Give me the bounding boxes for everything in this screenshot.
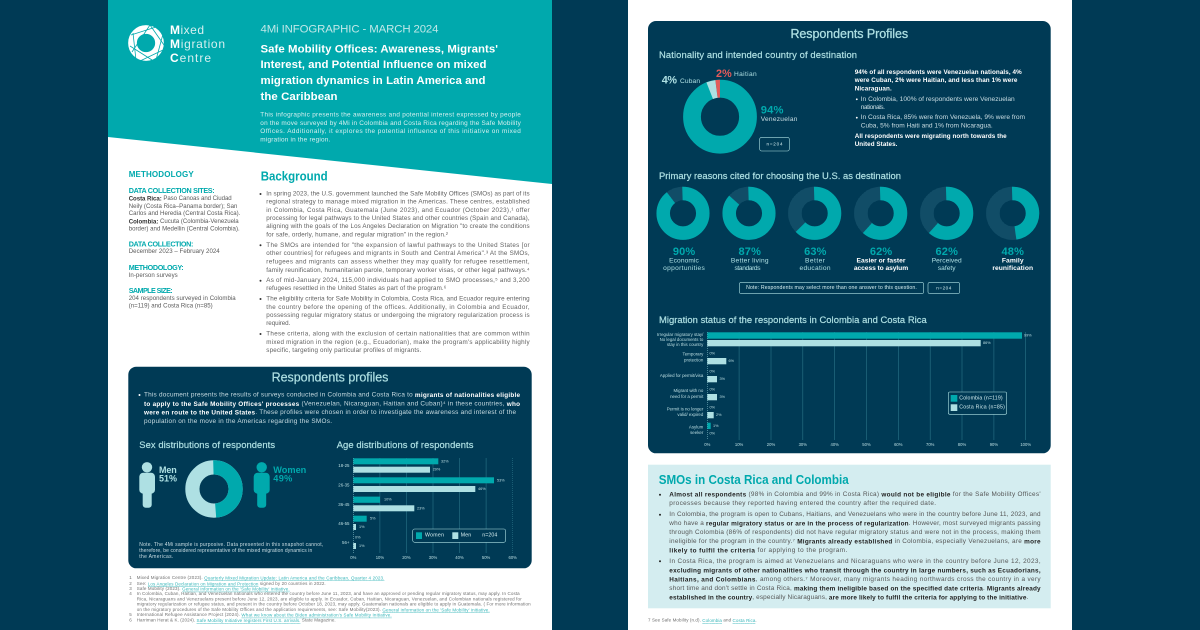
age legend: n=204	[482, 533, 497, 539]
label: Haitian	[716, 68, 757, 80]
migration status bar chart: 2%	[716, 413, 722, 417]
reason: economic opportunities: Economic	[669, 258, 700, 264]
intro description: on the move surveyed by 4Mi in Colombia and Costa Rica regarding the Safe Mobility	[260, 120, 522, 127]
migration status bar chart: 0%	[704, 442, 711, 447]
sample size box: n=204	[936, 286, 952, 290]
background bullets: in Colombia, Costa Rica, Guatemala (June 2023), and Ecuador (October 2023),¹ offer	[266, 207, 530, 214]
migration status bar chart: 30%	[799, 442, 807, 447]
panel bullets: Almost all respondents (98% in Colombia and 99% in Costa Rica) would not be eligible for the Safe Mobility Offices'	[669, 491, 1041, 498]
age bar chart: 0%	[350, 555, 357, 560]
migration status bar chart: 70%	[926, 442, 935, 447]
sidebar: methodology: 204 respondents surveyed in Colombia	[129, 295, 236, 302]
nationality summary text: were Cuban, 2% were Haitian, and less than 1% were	[854, 77, 1018, 84]
panel heading: Respondents Profiles	[790, 27, 908, 41]
sidebar: methodology: Costa Rica: Paso Canoas and Ciudad	[129, 195, 232, 202]
section: primary reasons	[659, 170, 1033, 294]
footnotes: 4	[129, 591, 132, 596]
panel: respondents profiles charts	[648, 21, 1051, 453]
migration status bar chart: 1%	[713, 424, 719, 428]
header kicker: 4Mi INFOGRAPHIC - MARCH 2024	[260, 24, 438, 36]
migration status bar chart: seeker	[690, 430, 704, 435]
background bullets: refugees resettled in the United States as part of the program.⁶	[266, 285, 447, 292]
migration status bar chart: 0%	[710, 388, 716, 392]
background bullets: regional strategy to manage mixed migration in the Americas. These centres, established	[266, 198, 530, 206]
age bar chart: 1%	[359, 525, 365, 529]
migration status bar chart: 3%	[720, 395, 726, 399]
migration status bar chart: 6%	[728, 359, 735, 363]
age bar chart: 50%	[482, 555, 491, 560]
migration status bar chart	[657, 332, 1032, 447]
age bar chart: 20%	[402, 555, 411, 560]
migration status legend	[948, 392, 1007, 414]
sampling note: Note. The 4Mi sample is purposive. Data presented in this snapshot cannot,	[139, 542, 323, 548]
panel: SMOs in Costa Rica and Colombia	[648, 465, 1051, 608]
panel bullets: In Colombia, the program is open to Cubans, Haitians, and Venezuelans who were in the country before June 11, 2023, and	[669, 511, 1041, 518]
icon: logo ring	[130, 25, 164, 61]
footnotes: 6	[129, 618, 132, 622]
migration status bar chart: stay in this country	[667, 342, 704, 347]
age bar chart: 23%	[417, 506, 425, 510]
migration status bar chart: 3%	[720, 377, 726, 381]
intro description: This infographic presents the awareness and potential interest expressed by people	[260, 112, 521, 118]
reason: family reunification	[992, 194, 1033, 272]
reason: economic opportunities: opportunities	[663, 265, 706, 272]
migration status bar chart: 0%	[710, 352, 716, 356]
logo: Mixed Migration Centre	[130, 23, 225, 65]
women value: 49%	[273, 474, 292, 484]
main title: the Caribbean	[260, 91, 338, 103]
intro description: migration in the region.	[260, 136, 331, 144]
background bullets: The SMOs are intended for "the expansion of lawful pathways to the United States [or	[266, 242, 530, 249]
logo: Mixed Migration Centre: Migration	[170, 37, 225, 51]
age bar chart: 1%	[359, 544, 365, 548]
background bullets: mixed migration in the region (e.g., Ecuadorian), make the program's applicability highly	[266, 339, 530, 346]
men value	[159, 465, 177, 484]
age bar chart: 60%	[509, 555, 517, 560]
right page	[628, 0, 1072, 630]
migration status bar chart: 100%	[1020, 442, 1031, 447]
age bar chart: 46-55	[338, 521, 350, 526]
reason: easier or faster access to asylum	[854, 194, 908, 272]
logo: Mixed Migration Centre: Mixed	[170, 23, 204, 37]
migration status bar chart: Asylum	[689, 424, 704, 430]
panel intro text: to apply to the Safe Mobility Offices' processes (Venezuelan, Nicaraguan, Haitian and Cuban)⁴ in these countries, who	[144, 400, 520, 408]
panel bullets: likely to fulfil the criteria for applying to the program.	[669, 547, 848, 554]
age bar chart: 40%	[455, 555, 464, 560]
panel heading: SMOs in Costa Rica and Colombia	[659, 472, 849, 487]
panel bullets: short time and don't settle in Costa Rica, making them ineligible based on the specified date criteria. Migrants already	[669, 585, 1041, 592]
panel bullets: Haitians, and Colombians, among others.⁷ Moreover, many migrants heading northwards cross the country in a very	[669, 576, 1041, 583]
age bar chart: 53%	[497, 478, 505, 482]
nationality summary text: Cuba, 5% from Haiti and 1% from Nicaragua.	[861, 122, 993, 130]
panel bullets: who have a regular migratory status or are in the process of regularization. However, most surveyed migrants passing	[668, 520, 1041, 527]
panel bullets: ineligible for the program in the country.⁷ Migrants already established in Colombia, especially Venezuelans, are more	[669, 538, 1041, 545]
main title: Safe Mobility Offices: Awareness, Migrants'	[260, 43, 498, 55]
sidebar: methodology: Colombia: Cucuta (Colombia-Venezuela	[129, 218, 239, 225]
reason: easier or faster access to asylum: Easier or faster	[856, 258, 906, 264]
sampling note: the Americas.	[139, 554, 173, 560]
reason: easier or faster access to asylum: access to asylum	[854, 265, 908, 272]
intro description: Offices. Additionally, it explores the potential influence of this initiative on mixed	[260, 128, 521, 135]
nationality summary text: United States.	[855, 141, 898, 148]
migration status bar chart: need for a permit	[670, 394, 704, 399]
sex heading: Sex distributions of respondents	[139, 439, 275, 450]
label: Venezuelan: Venezuelan	[761, 116, 798, 123]
background bullets: As of mid-January 2024, 115,000 individuals had applied to SMO processes,⁵ and 3,200	[266, 277, 530, 284]
background bullets: the country before the opening of the offices. Additionally, in Colombia and Ecuador,	[266, 304, 530, 311]
sidebar: methodology: METHODOLOGY:	[129, 263, 184, 272]
migration status bar chart: 90%	[990, 442, 998, 447]
reason: perceived safety: Perceived	[932, 258, 962, 264]
sidebar: methodology: border) and Medellin (Central Colombia).	[129, 226, 240, 232]
main title: Interest, and Potential Influence on mixed	[260, 59, 487, 71]
sidebar: methodology: (n=119) and Costa Rica (n=85)	[129, 302, 213, 310]
migration status heading: Migration status of the respondents in Colombia and Costa Rica	[659, 314, 927, 325]
label: Haitian: Haitian	[734, 71, 757, 78]
sampling note	[139, 542, 323, 560]
panel bullets	[659, 491, 1041, 601]
nationality summary text: nationals.	[861, 104, 885, 111]
age heading: Age distributions of respondents	[337, 439, 474, 450]
migration status bar chart: 80%	[958, 442, 966, 447]
migration status bar chart: Temporary	[683, 352, 704, 356]
migration status bar chart: Applied for permit/visa	[660, 373, 704, 378]
panel heading: Respondents profiles	[272, 370, 388, 384]
age bar chart: 46%	[478, 487, 486, 491]
nationality summary text: In Costa Rica, 85% were from Venezuela, 9% were from	[861, 114, 1026, 121]
reason: economic opportunities: 90%	[673, 246, 695, 258]
footnote 7: 7 See Safe Mobility (n.d). Colombia and Costa Rica.	[648, 618, 757, 622]
nationality summary text: In Colombia, 100% of respondents were Venezuelan	[861, 96, 1015, 103]
panel bullets: established in the country, especially Nicaraguans, are more likely to fulfil the criteria for applying to the initiative.	[669, 594, 1029, 601]
women value	[273, 465, 307, 484]
migration status bar chart: No legal documents to	[660, 337, 704, 342]
reason: better education	[795, 194, 834, 272]
age bar chart: 29%	[433, 468, 441, 472]
label: Venezuelan	[761, 104, 798, 123]
migration status bar chart: 50%	[862, 442, 871, 447]
age distribution	[337, 439, 517, 560]
logo: Mixed Migration Centre: Centre	[170, 51, 211, 65]
panel intro text: This document presents the results of surveys conducted in Colombia and Costa Rica to migrants of nationalities eligible	[144, 392, 520, 398]
section: nationality	[659, 49, 1026, 153]
sample size box: n=204	[766, 142, 783, 147]
migration status bar chart: Migrant with no	[674, 388, 704, 393]
background bullets: These criteria, along with the exclusion of certain nationalities that are common within	[266, 330, 530, 338]
nationality donut chart	[684, 80, 756, 153]
reason: better living standards: standards	[734, 265, 761, 272]
reasons heading: Primary reasons cited for choosing the U.S. as destination	[659, 170, 901, 181]
background bullets: processing for legal pathways to the United States and other countries (Spain and Canada),	[266, 215, 530, 222]
panel intro text	[138, 392, 520, 425]
footnotes: Harriman Herat & K. (2024). Safe Mobility Initiative registers First U.S. arrivals. State Magazine.	[137, 618, 336, 622]
reason: family reunification: Family	[1002, 258, 1024, 264]
background bullets: specific, targeting only particular profiles of migrants.	[266, 347, 422, 354]
footnotes: 2	[129, 581, 132, 586]
label: Haitian: 2%	[716, 68, 732, 80]
migration status bar chart: 60%	[894, 442, 903, 447]
footnotes: on the migratory procedures of the Safe Mobility Offices and the application requirements, see: Safe Mobility(2023). General information on the 'Safe Mobility' initiative.	[137, 607, 490, 612]
footnotes: See: Los Angeles Declaration on Migration and Protection signed by 20 countries in 2022.	[137, 581, 326, 586]
age bar chart: 5%	[370, 517, 376, 521]
migration status bar chart: 99%	[1024, 334, 1032, 338]
migration status bar chart: Permit is no longer	[667, 406, 704, 412]
migration status bar chart: 40%	[831, 442, 839, 447]
panel bullets: through Colombia (86% of respondents) did not have regular migratory status and were not in the process, making them	[669, 529, 1041, 536]
icon: woman	[254, 462, 270, 508]
age bar chart: 10%	[384, 498, 392, 502]
migration status legend: Costa Rica (n=85)	[959, 404, 1005, 410]
header band	[108, 0, 552, 184]
label: Cuban: Cuban	[680, 78, 700, 85]
background bullets: The eligibility criteria for Safe Mobility in Colombia, Costa Rica, and Ecuador require entering	[266, 296, 530, 302]
reason: better education: education	[800, 265, 831, 272]
men value: Men	[159, 465, 177, 475]
left page	[108, 0, 552, 630]
panel bullets: excluding migrants of other nationalities who transit through the country in large numbers, such as Ecuadorians,	[669, 567, 1041, 574]
age bar chart: 18-25	[338, 463, 350, 468]
age legend	[413, 529, 506, 542]
migration status bar chart: 0%	[710, 370, 716, 374]
women value: Women	[273, 465, 307, 475]
main title: migration dynamics in Latin America and	[260, 75, 486, 87]
age bar chart: 26-35	[338, 482, 350, 488]
sidebar: methodology: DATA COLLECTION:	[129, 240, 193, 248]
footnotes: Safe Mobility (2023). General information on the 'Safe Mobility' initiative.	[137, 586, 290, 591]
footnotes: migratory regularization or refugee status, and present in the country before October 18, 2023, may apply. Guatemalan nationals are eligible to apply in Guatemala. ( For more information	[137, 602, 531, 606]
reason: better living standards: Better living	[731, 258, 769, 264]
migration status bar chart: 86%	[983, 341, 991, 345]
background bullets: for safe, orderly, humane, and regular migration" in the region.²	[266, 232, 448, 238]
sample size box	[928, 282, 960, 294]
age bar chart: 36-45	[338, 502, 350, 507]
background bullets: possessing regular migratory status or undergoing the migratory regularization process is	[266, 312, 530, 319]
men value: 51%	[159, 474, 177, 484]
multiple answer note: Note: Respondents may select more than one answer to this question.	[746, 285, 917, 291]
background section	[260, 168, 530, 354]
age bar chart: 10%	[376, 555, 384, 560]
background bullets	[260, 190, 530, 354]
sex distribution	[139, 439, 323, 560]
reason: better education: 63%	[804, 246, 827, 258]
migration status bar chart: valid/ expired	[677, 412, 704, 417]
panel bullets: In Costa Rica, the program is aimed at Venezuelans and Nicaraguans who were in the country before June 12, 2023,	[669, 558, 1041, 565]
migration status bar chart: 0%	[710, 431, 716, 435]
background bullets: other countries] for refugees and migrants in South and Central America".³ At the SMOs,	[266, 250, 530, 257]
section: migration status	[657, 314, 1032, 447]
age legend: Men	[461, 533, 471, 539]
migration status legend: Colombia (n=119)	[959, 395, 1003, 401]
footnotes: In Colombia, Cuban, Haitian, and Venezuelan nationals who entered the country before June 11, 2023, and have an approved or pending regular migratory status, may apply. In Costa	[137, 591, 520, 596]
reason: family reunification: 48%	[1002, 246, 1024, 258]
age bar chart: 0%	[355, 536, 361, 540]
nationality summary text: 94% of all respondents were Venezuelan nationals, 4%	[855, 69, 1022, 76]
sidebar: methodology: Carlos and Heredia (Central Costa Rica).	[129, 210, 241, 217]
panel bullets: processes because they reported having entered the country after the required date.	[669, 500, 936, 507]
footnotes: Rica, Nicaraguans and Venezuelans present before June 12, 2023, are eligible to apply. In Ecuador, Cuban, Haitian, Nicaraguan, Venezuelan, and Colombian nationals registered for	[137, 596, 522, 602]
nationality summary text: Nicaraguan.	[855, 86, 892, 92]
age bar chart: 30%	[429, 555, 437, 560]
age legend: Women	[425, 533, 444, 539]
intro description	[260, 112, 522, 144]
nationality heading: Nationality and intended country of destination	[659, 49, 857, 60]
background bullets: refugees and migrants can assess whether they may qualify for refugee resettlement,	[266, 258, 530, 266]
background bullets: family reunification, humanitarian parole, temporary worker visas, or other legal pathways.⁴	[266, 267, 530, 274]
label: Cuban	[662, 75, 700, 87]
nationality summary text	[854, 69, 1026, 148]
label: Cuban: 4%	[662, 75, 677, 87]
reason: perceived safety	[927, 194, 966, 272]
footnotes: 5	[129, 612, 132, 617]
background bullets: aligning with the goals of the Los Angeles Declaration on Migration "to create the conditions	[266, 223, 530, 230]
age bar chart: 32%	[441, 459, 449, 463]
panel intro text: population on the move in the Americas regarding the SMOs.	[144, 418, 332, 425]
footnotes	[129, 575, 531, 622]
background bullets: In spring 2023, the U.S. government launched the Safe Mobility Offices (SMOs) as part of its	[266, 190, 530, 198]
sidebar: methodology: DATA COLLECTION SITES:	[129, 186, 215, 195]
footnotes: 1	[129, 575, 132, 580]
multiple answer note	[739, 282, 924, 294]
sidebar: methodology	[129, 170, 241, 310]
footnotes: 3	[129, 586, 132, 591]
reason: family reunification: reunification	[992, 265, 1033, 272]
age bar chart: 56+	[342, 540, 350, 545]
reason: easier or faster access to asylum: 62%	[870, 246, 892, 258]
migration status bar chart: Irregular migratory stay/	[657, 332, 704, 337]
background bullets: required.	[266, 320, 291, 327]
reason: better education: Better	[805, 258, 826, 264]
sidebar: methodology: December 2023 – February 2024	[129, 248, 220, 255]
icon: man	[139, 462, 155, 508]
panel intro text: were en route to the United States. These profiles were chosen in order to investigate the awareness and interest of the	[143, 409, 516, 416]
migration status bar chart: protection	[684, 358, 704, 362]
reason: economic opportunities	[663, 194, 706, 272]
footnotes: Mixed Migration Centre (2023). Quarterly Mixed Migration Update: Latin America and the Caribbean, Quarter 4 2023.	[137, 575, 384, 580]
sampling note: therefore, be considered representative of the mixed migration dynamics in	[139, 548, 313, 554]
methodology heading: METHODOLOGY	[129, 170, 194, 179]
panel: respondents profiles	[128, 367, 532, 568]
migration status bar chart: 0%	[710, 406, 716, 410]
reason: better living standards	[729, 194, 769, 272]
sidebar: methodology: SAMPLE SIZE:	[129, 286, 173, 295]
main title	[260, 43, 498, 103]
reason: perceived safety: safety	[938, 265, 956, 272]
nationality summary text: All respondents were migrating north towards the	[855, 133, 1007, 140]
sidebar: methodology: Neily (Costa Rica–Panama border); San	[129, 203, 237, 210]
background heading: Background	[261, 168, 328, 184]
label: Venezuelan: 94%	[761, 104, 783, 116]
migration status bar chart: 20%	[767, 442, 775, 447]
footnotes: International Refugee Assistance Project (2024). What we know about the Biden administration's Safe Mobility Initiative.	[137, 612, 392, 617]
reason: better living standards: 87%	[739, 246, 761, 258]
sidebar: methodology: In-person surveys	[129, 272, 178, 279]
age bar chart	[338, 458, 517, 560]
sex donut chart	[192, 467, 236, 511]
sample size box	[760, 137, 789, 151]
reason: perceived safety: 62%	[936, 246, 958, 258]
migration status bar chart: 10%	[735, 442, 744, 447]
